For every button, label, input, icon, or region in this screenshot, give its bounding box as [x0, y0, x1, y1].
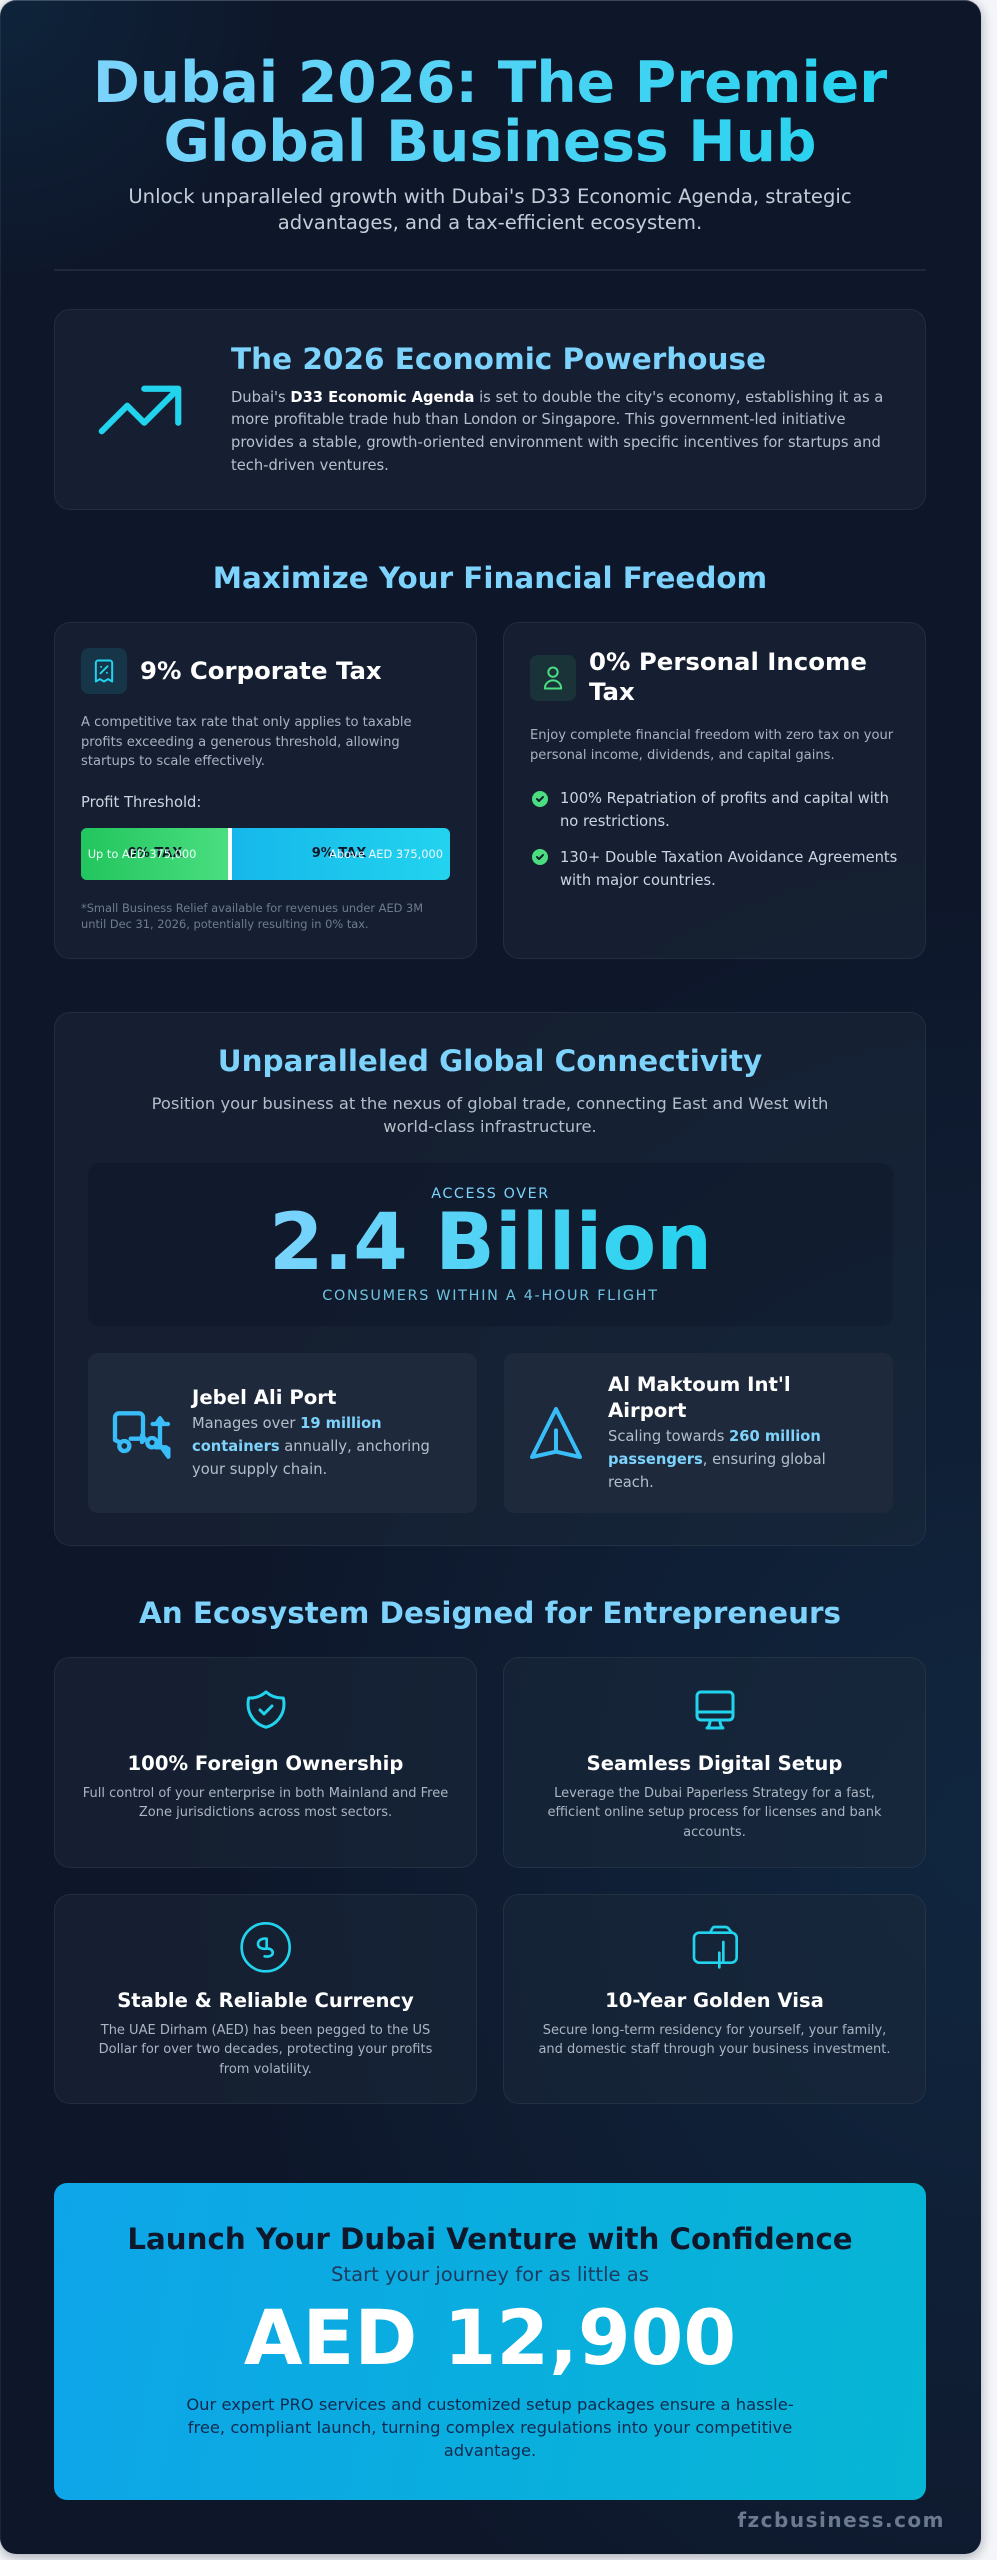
segment label: nine percent tax: 9% TAX	[312, 846, 366, 861]
text: foreign ownership: Full control of your enterprise in both Mainland and Free	[83, 1786, 448, 1800]
icon: user	[530, 655, 576, 701]
text: economic agenda: Dubai's D33 Economic Agenda is set to double the city's economy, establishing it as a	[231, 389, 883, 406]
title	[92, 54, 888, 171]
subtitle: Unlock unparalleled growth with Dubai's D33 Economic Agenda, strategic	[128, 185, 852, 208]
footnote: small business relief: until Dec 31, 2026, potentially resulting in 0% tax.	[81, 917, 369, 931]
text: stable currency	[99, 2022, 432, 2077]
icon: shield check	[246, 1690, 286, 1729]
text: PRO services	[186, 2394, 794, 2460]
text: stable currency: Dollar for over two decades, protecting your profits	[99, 2042, 432, 2057]
text: PRO services: free, compliant launch, turning complex regulations into your competitive	[188, 2418, 792, 2436]
panel: corporate tax	[54, 622, 477, 959]
text: personal tax description: Enjoy complete financial freedom with zero tax on your	[530, 728, 893, 743]
text: economic agenda: more profitable trade hub than London or Singapore. This government-led initiative	[231, 411, 845, 428]
heading: al maktoum airport: Airport	[608, 1399, 686, 1422]
card: jebel ali port	[88, 1353, 477, 1513]
heading: personal income tax: Tax	[589, 677, 635, 706]
text: port description: containers annually, anchoring	[192, 1438, 430, 1454]
text: PRO services: Our expert PRO services and customized setup packages ensure a hassle-	[186, 2394, 794, 2414]
subtitle: advantages, and a tax-efficient ecosystem.	[278, 211, 702, 234]
text: connectivity description	[152, 1094, 828, 1136]
text: port description	[192, 1414, 430, 1478]
text: personal tax description: personal income, dividends, and capital gains.	[530, 748, 835, 762]
icon: trending up arrow	[98, 386, 182, 434]
panel: personal income tax	[503, 622, 926, 959]
text: digital setup: Leverage the Dubai Paperless Strategy for a fast,	[554, 1786, 875, 1800]
bullet: double taxation agreements: 130+ Double Taxation Avoidance Agreements	[560, 848, 897, 866]
text: economic agenda: tech-driven ventures.	[231, 457, 389, 474]
bullet: double taxation agreements: with major countries.	[560, 872, 716, 888]
heading: digital setup: Seamless Digital Setup	[587, 1752, 842, 1774]
text: connectivity description: world-class infrastructure.	[383, 1116, 597, 1136]
text: stable currency: The UAE Dirham (AED) has been pegged to the US	[101, 2022, 430, 2038]
bullet: repatriation	[560, 790, 889, 830]
card: stable currency	[54, 1894, 477, 2104]
heading: entrepreneur ecosystem: An Ecosystem Designed for Entrepreneurs	[139, 1596, 841, 1630]
text: connectivity description: Position your business at the nexus of global trade, connecting East and West with	[152, 1094, 828, 1112]
heading: economic powerhouse: The 2026 Economic Powerhouse	[231, 342, 766, 376]
bullet: double taxation agreements	[560, 848, 897, 888]
card: al maktoum airport	[504, 1353, 893, 1513]
footnote: small business relief: *Small Business Relief available for revenues under AED 3M	[81, 901, 423, 915]
segment note: above threshold: Above AED 375,000	[329, 847, 443, 861]
card: digital setup	[503, 1657, 926, 1868]
heading: foreign ownership: 100% Foreign Ownership	[128, 1752, 403, 1774]
heading: al maktoum airport: Al Maktoum Int'l	[608, 1373, 791, 1396]
text: corporate tax description	[81, 715, 412, 769]
stat label bottom: CONSUMERS WITHIN A 4-HOUR FLIGHT	[322, 1288, 659, 1304]
icon: paper airplane	[530, 1406, 582, 1459]
heading: corporate tax: 9% Corporate Tax	[140, 656, 382, 685]
title: Global Business Hub	[164, 108, 816, 174]
stat: 2.4 billion consumers	[88, 1163, 893, 1326]
title: Dubai 2026: The Premier	[93, 50, 887, 116]
heading: stable currency: Stable & Reliable Currency	[117, 1988, 414, 2012]
text: golden visa	[538, 2022, 891, 2057]
text: golden visa: Secure long-term residency for yourself, your family,	[543, 2022, 886, 2038]
text: economic agenda	[231, 389, 883, 474]
card: golden visa	[503, 1894, 926, 2104]
icon: check two	[532, 849, 548, 865]
text: stable currency: from volatility.	[219, 2062, 312, 2077]
bullet: repatriation: 100% Repatriation of profits and capital with	[560, 790, 889, 807]
segment note: up to threshold: Up to AED 375,000	[88, 847, 196, 861]
icon: tax receipt	[81, 648, 127, 694]
text: PRO services: advantage.	[444, 2440, 536, 2460]
heading: financial freedom: Maximize Your Financial Freedom	[213, 561, 767, 595]
footnote: small business relief	[81, 901, 423, 931]
text: personal tax description	[530, 728, 894, 762]
text: foreign ownership: Zone jurisdictions across most sectors.	[139, 1805, 392, 1820]
text: economic agenda: provides a stable, growth-oriented environment with specific incentives for startups and	[231, 434, 881, 451]
text: foreign ownership	[83, 1786, 448, 1820]
text: corporate tax description: startups to scale effectively.	[81, 754, 265, 769]
text: corporate tax description: A competitive tax rate that only applies to taxable	[81, 715, 412, 730]
text: port description: your supply chain.	[192, 1460, 327, 1478]
panel: global connectivity	[54, 1012, 926, 1546]
panel: economic powerhouse	[54, 309, 926, 510]
heading: golden visa: 10-Year Golden Visa	[605, 1988, 824, 2012]
text: corporate tax description: profits exceeding a generous threshold, allowing	[81, 734, 400, 750]
icon: check one	[532, 791, 548, 807]
heading: launch venture: Launch Your Dubai Venture with Confidence	[127, 2222, 853, 2256]
text: golden visa: and domestic staff through your business investment.	[538, 2042, 891, 2057]
icon: visa briefcase	[692, 1926, 738, 1969]
text: digital setup: efficient online setup process for licenses and bank	[547, 1805, 882, 1820]
heading: al maktoum airport	[608, 1373, 791, 1422]
text: port description: Manages over 19 million	[192, 1414, 382, 1432]
icon: truck	[112, 1411, 170, 1459]
icon: currency coin	[240, 1922, 291, 1973]
stat label top: ACCESS OVER	[431, 1186, 550, 1202]
text: digital setup	[547, 1786, 882, 1840]
watermark: fzcbusiness.com	[737, 2508, 945, 2532]
text: airport description: passengers, ensuring global	[608, 1450, 826, 1468]
icon: desktop monitor	[696, 1690, 734, 1730]
heading: global connectivity: Unparalleled Global Connectivity	[218, 1044, 762, 1078]
text: start your journey: Start your journey for as little as	[331, 2263, 649, 2286]
segment label: zero percent tax: 0% TAX	[128, 846, 182, 861]
text: airport description	[608, 1428, 826, 1490]
text: airport description: Scaling towards 260 million	[608, 1428, 821, 1444]
call to action panel	[54, 2183, 926, 2500]
heading: jebel ali port: Jebel Ali Port	[192, 1386, 336, 1409]
text: digital setup: accounts.	[683, 1825, 746, 1840]
subtitle	[128, 185, 852, 234]
label: profit threshold: Profit Threshold:	[81, 794, 201, 811]
heading: personal income tax	[589, 647, 867, 706]
heading: personal income tax: 0% Personal Income	[589, 647, 867, 676]
chart: profit threshold bar	[81, 828, 450, 880]
text: airport description: reach.	[608, 1474, 654, 1490]
price: AED 12,900: AED 12,900	[244, 2294, 736, 2382]
card: foreign ownership	[54, 1657, 477, 1868]
stat value: 2.4 Billion	[269, 1197, 712, 1288]
bullet: repatriation: no restrictions.	[560, 813, 670, 830]
